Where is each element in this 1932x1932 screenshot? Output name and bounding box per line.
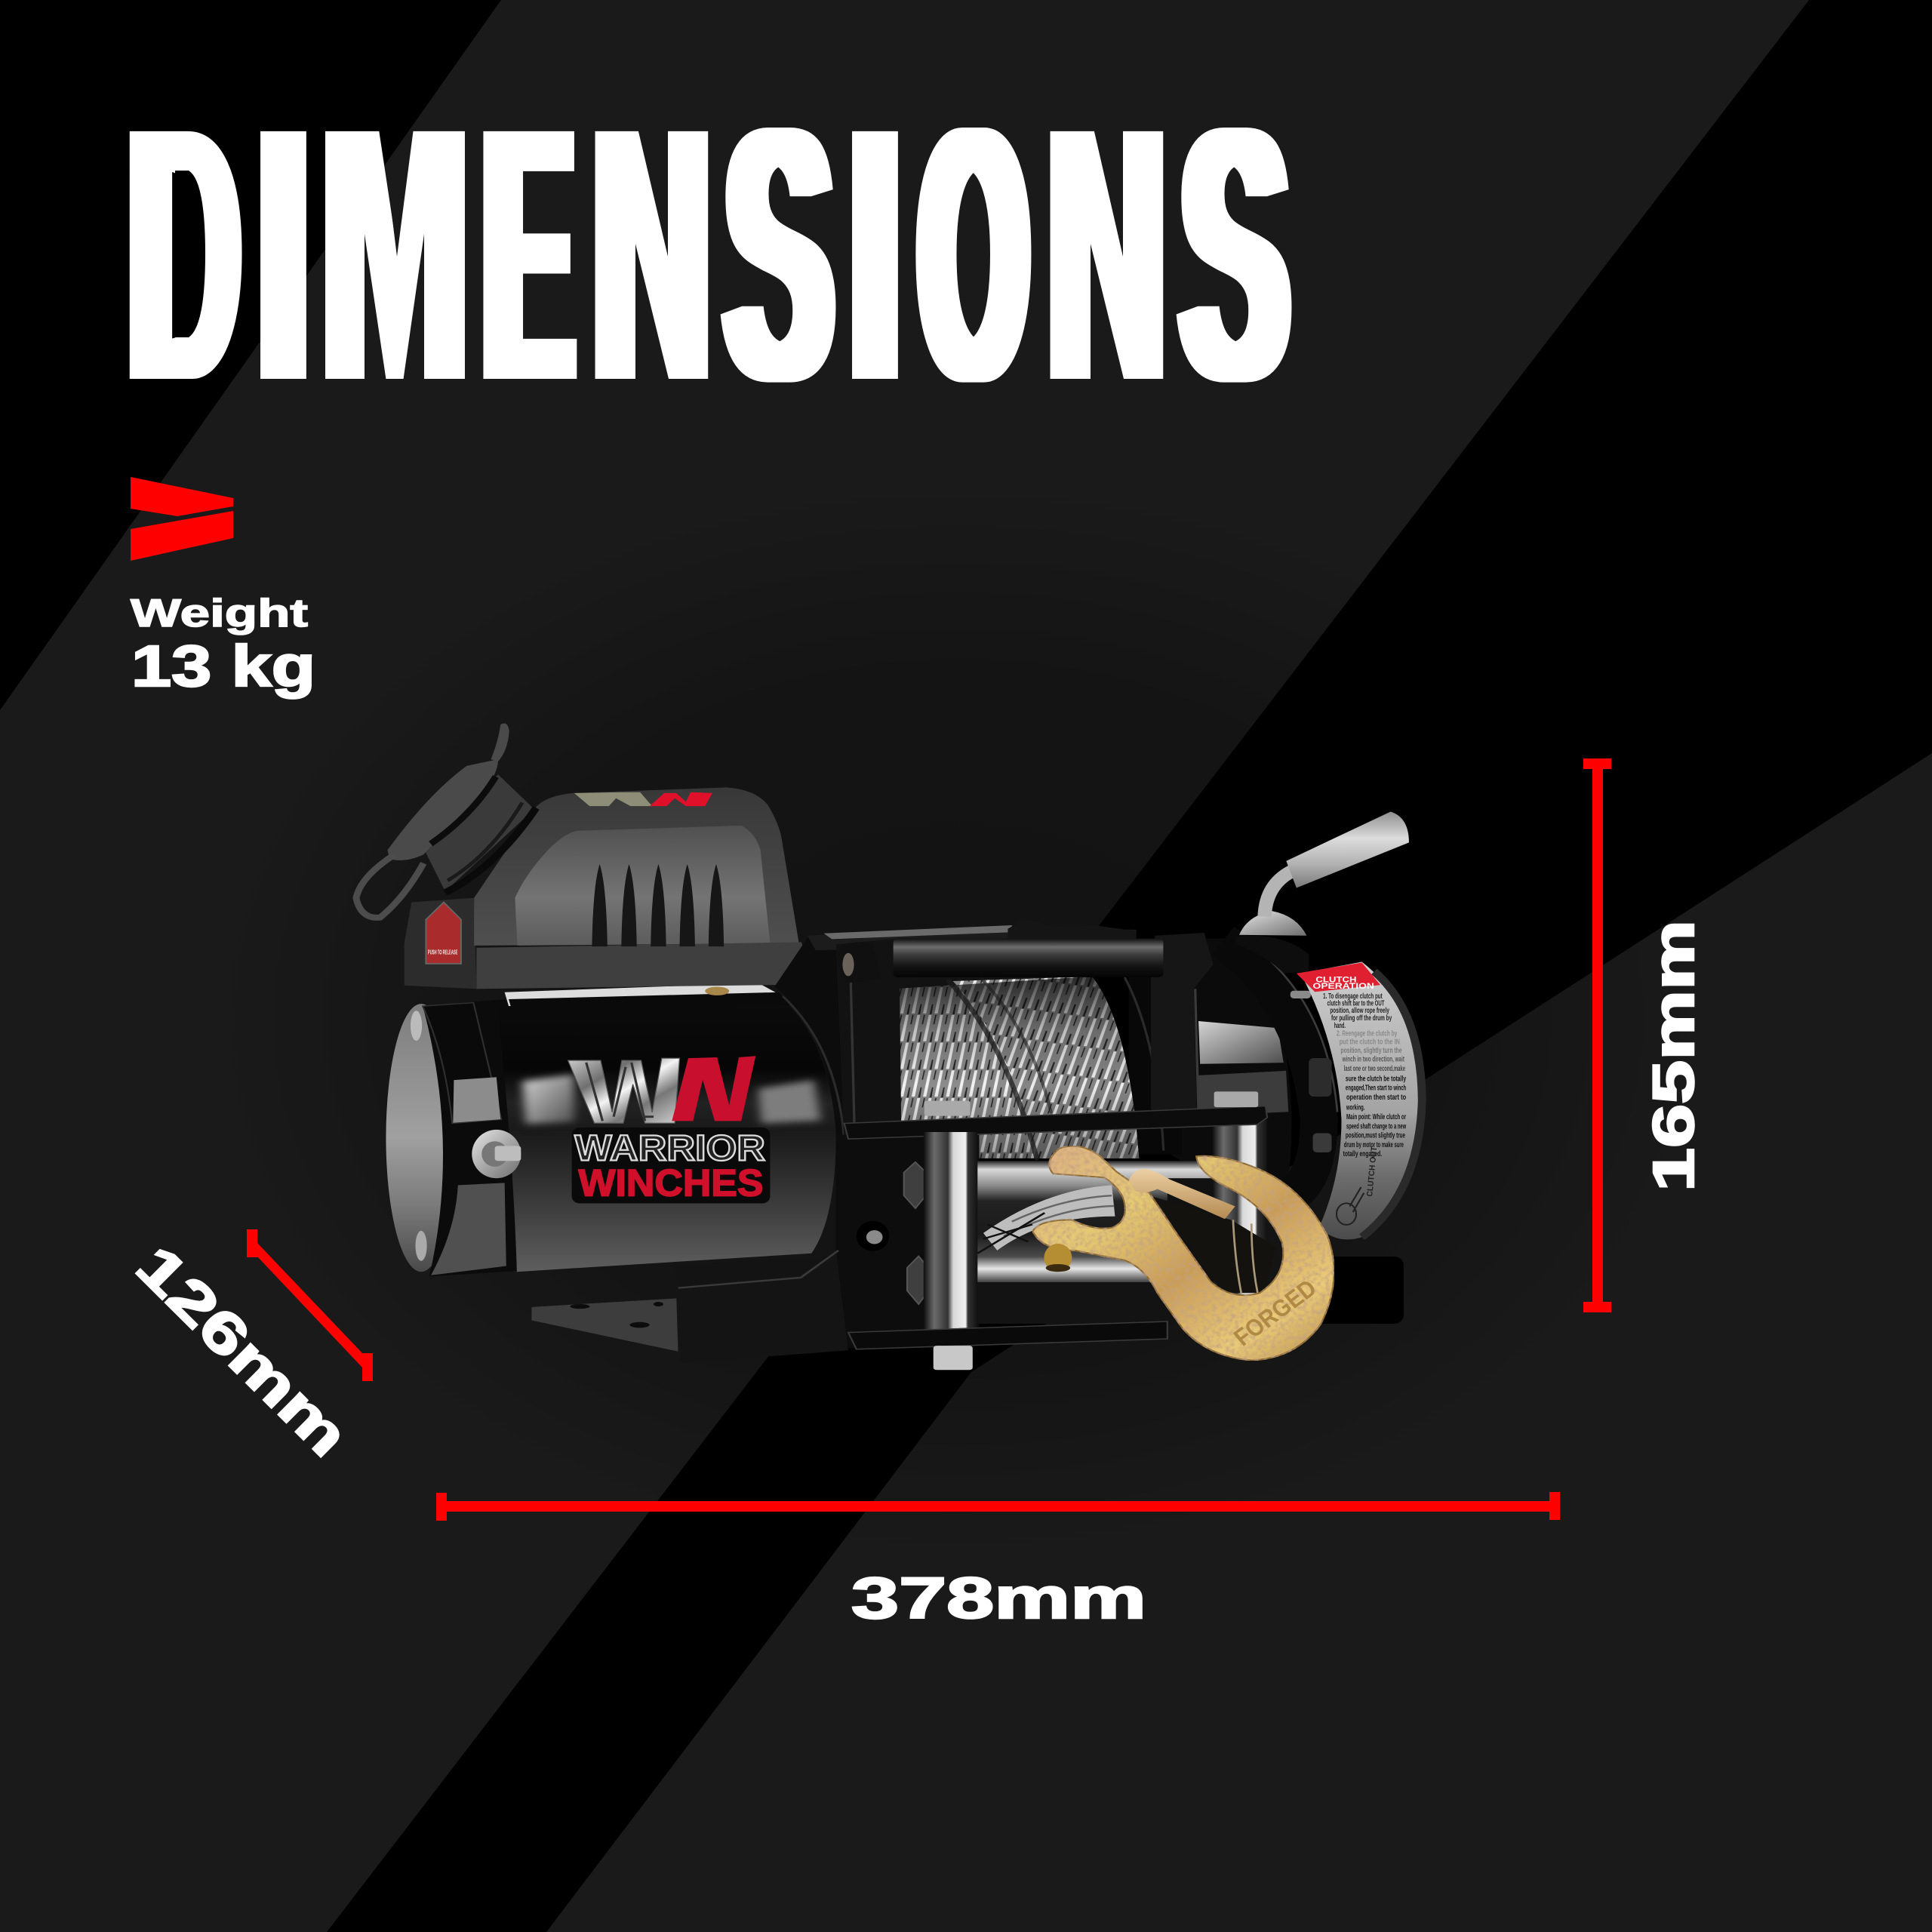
ground shadow (1313, 1257, 1404, 1324)
label clutch icon: CLUTCH OUT (1365, 1146, 1379, 1197)
label instructions: for pulling off the drum by (1331, 1014, 1392, 1023)
bottom rail (848, 1321, 1168, 1349)
control box: PUSH TO RELEASE (428, 949, 457, 955)
title: I (851, 54, 899, 456)
label instructions: position,must slightly true (1346, 1132, 1405, 1140)
title: I (260, 54, 307, 456)
label instructions: hand. (1334, 1022, 1346, 1030)
control box (356, 724, 808, 995)
winch product illustration (356, 724, 1422, 1370)
label instructions: Main point: While clutch or (1346, 1113, 1406, 1121)
fairlead rollers and bracket (836, 1091, 1267, 1370)
right vertical roller (1212, 1112, 1267, 1300)
title: M (325, 54, 466, 456)
title: N (1051, 54, 1163, 456)
motor emblem (568, 1056, 770, 1204)
title: O (921, 54, 1026, 456)
left vertical roller (924, 1132, 977, 1343)
dimension: length line (436, 1492, 1560, 1521)
label instructions: put the clutch to the IN (1340, 1038, 1400, 1047)
label instructions: winch in two direction, wait (1342, 1056, 1404, 1064)
title: E (485, 54, 571, 456)
label instructions: working. (1346, 1104, 1365, 1112)
side hex bolts (904, 1162, 928, 1304)
rope loop on roller (977, 1185, 1115, 1254)
vent slots (592, 864, 724, 946)
mounting nut (472, 1130, 521, 1178)
connector between motor and frame (774, 936, 906, 1349)
label red header: CLUTCH (1315, 976, 1357, 984)
hook body (1032, 1146, 1334, 1361)
weight label: Weight (131, 592, 308, 635)
dimension: depth value: 126mm (124, 1233, 361, 1469)
side frame and drum housing (774, 919, 1292, 1349)
motor top reflection (505, 983, 783, 1006)
lower side plate (836, 1135, 979, 1346)
shackle pin (1044, 1244, 1072, 1272)
emblem WW mark (568, 1058, 679, 1123)
hook latch (1129, 1169, 1235, 1219)
clutch lever (1235, 812, 1409, 974)
dimension: height line (1583, 758, 1611, 1312)
dimension: height value: 165mm (1641, 920, 1706, 1192)
label instructions: 1. To disengage clutch put (1323, 992, 1383, 1001)
emblem wordmark silver: WARRIOR (574, 1128, 765, 1168)
forged hook (1032, 1146, 1334, 1361)
label instructions: totally engaged. (1343, 1150, 1382, 1158)
gear ring (1223, 939, 1337, 1193)
emblem wordmark red: WINCHES (579, 1162, 763, 1204)
dimension: length value: 378mm (851, 1566, 1146, 1631)
title (130, 128, 1292, 383)
weight block (131, 592, 315, 699)
title: S (727, 54, 832, 456)
bottom bolt (934, 1346, 973, 1370)
dimension: depth line (247, 1229, 373, 1381)
label red header (1297, 963, 1380, 992)
hook stamped text: FORGED (1228, 1274, 1321, 1351)
soft halo behind winch (204, 475, 1713, 1562)
motor glossy highlights (522, 1074, 820, 1124)
socket rubber cap (387, 759, 498, 860)
wire rope drum (896, 977, 1182, 1158)
small top logo (574, 792, 712, 806)
icon: red brand chevron (131, 477, 233, 561)
label instructions: engaged,Then start to winch (1346, 1084, 1406, 1092)
main tie rod (894, 939, 1163, 977)
emblem red N mark (672, 1056, 755, 1121)
motor cylinder (386, 983, 836, 1276)
clutch label drum (1300, 961, 1422, 1239)
right housing (1168, 939, 1292, 1220)
flat fairlead bar (844, 1106, 1267, 1139)
title: N (595, 54, 708, 456)
label instructions: operation then start to (1346, 1094, 1406, 1102)
label clutch icon (1337, 1146, 1379, 1225)
mounting screw (705, 986, 729, 995)
label instructions: drum by motor to make sure (1344, 1141, 1404, 1149)
label instructions: speed shaft change to a new (1346, 1123, 1406, 1131)
hook interior shadow (1153, 1197, 1276, 1293)
text: S (1183, 54, 1287, 456)
red release button (426, 903, 461, 964)
label instructions: sure the clutch be totally (1346, 1075, 1406, 1084)
weight value: 13 kg (131, 634, 315, 699)
label instructions: position, slightly turn the (1340, 1047, 1402, 1055)
label instructions: position, allow rope freely (1330, 1007, 1389, 1015)
motor base bracket (531, 1251, 848, 1363)
top tie rod nub (1008, 919, 1137, 941)
label instructions: last one or two second,make (1344, 1065, 1405, 1073)
label instructions: 2. Reengage the clutch by (1337, 1030, 1397, 1038)
label instructions: clutch shift bar to the OUT (1327, 1000, 1384, 1008)
label red header: OPERATION (1313, 982, 1374, 991)
label instructions (1323, 992, 1406, 1158)
top bolts (924, 1091, 1258, 1116)
socket barrel (423, 774, 534, 891)
title: D (131, 54, 238, 456)
frame uprights and tie rod (836, 933, 1214, 1152)
horizontal chrome roller (975, 1161, 1217, 1284)
clutch drum assembly (1223, 812, 1422, 1239)
background black diagonal top left (0, 0, 501, 710)
